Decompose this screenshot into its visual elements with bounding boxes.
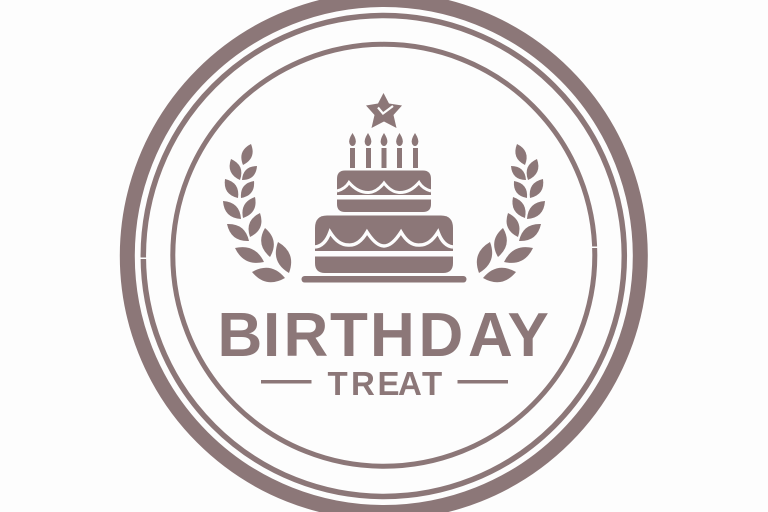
icon: lower cake tier: [314, 216, 454, 273]
icon: upper cake tier: [336, 170, 432, 212]
icon: star with check: [366, 93, 402, 128]
subtitle rule: right: [458, 380, 508, 384]
icon: cake plate: [302, 276, 466, 282]
badge rings: [127, 0, 640, 512]
subtitle: TREAT: TREAT: [328, 365, 442, 402]
title: BIRTHDAY: BIRTHDAY: [218, 301, 549, 370]
icon: candles: [349, 133, 418, 168]
icon: left laurel: [219, 142, 296, 285]
icon: right laurel: [472, 142, 549, 285]
subtitle rule: left: [261, 380, 312, 384]
